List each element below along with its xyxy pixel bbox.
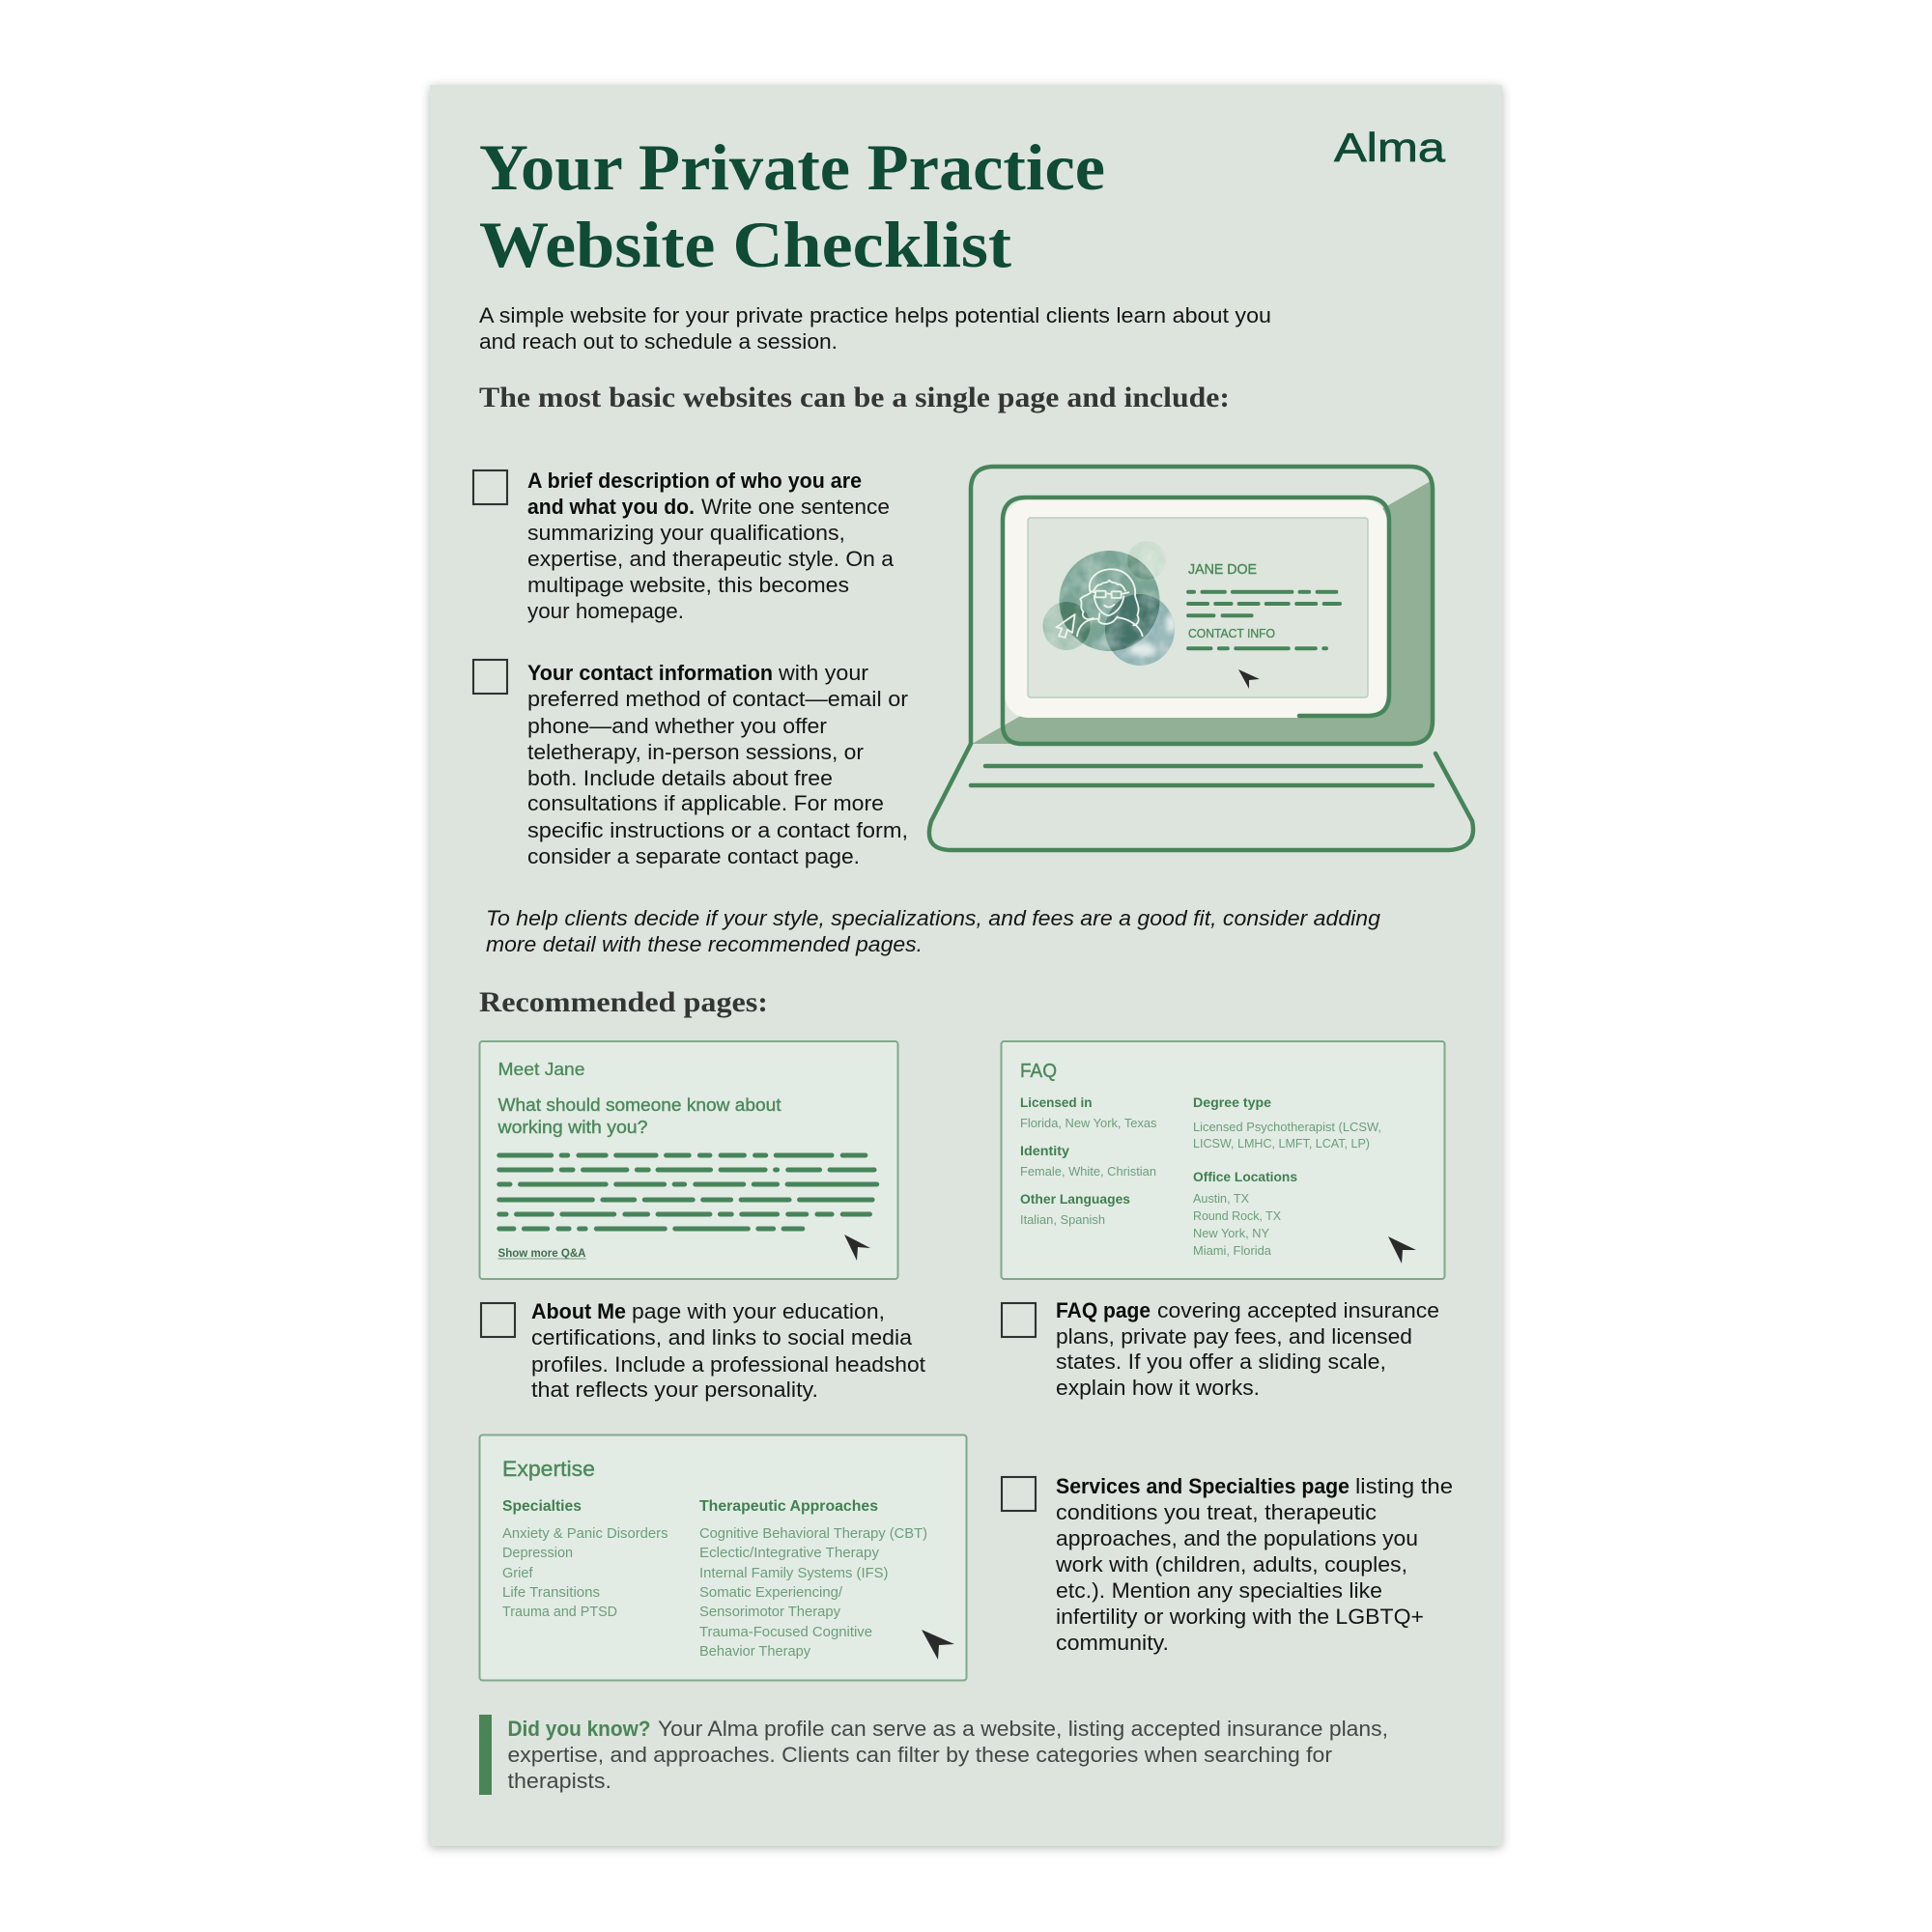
panel: Expertise card: Eclectic/Integrative Therapy [699, 1546, 880, 1561]
panel: FAQ card: Italian, Spanish [1020, 1213, 1105, 1227]
panel: FAQ card: Identity [1020, 1143, 1069, 1158]
panel: Expertise card [479, 1435, 966, 1681]
intro text [479, 303, 1271, 354]
panel: Meet Jane card: working with you? [497, 1117, 647, 1137]
text block: contact information: consider a separate contact page. [527, 844, 860, 868]
panel: Expertise card: Somatic Experiencing/ [699, 1585, 843, 1601]
panel: FAQ card: Licensed in [1020, 1094, 1092, 1110]
text block: Services and Specialties page: infertility or working with the LGBTQ+ [1056, 1605, 1424, 1629]
text block: contact information: with your [778, 661, 868, 685]
text block: contact information: Your contact information [527, 661, 773, 685]
text block: About Me page: that reflects your personality. [531, 1378, 818, 1402]
text block: About Me page: profiles. Include a professional headshot [531, 1352, 925, 1377]
panel: FAQ card: Licensed Psychotherapist (LCSW, [1193, 1121, 1381, 1134]
laptop page text: JANE DOE [1188, 562, 1257, 578]
panel: FAQ card: Degree type [1193, 1094, 1271, 1110]
text block: About Me page: page with your education, [632, 1299, 885, 1323]
text block: brief description: multipage website, this becomes [527, 573, 849, 597]
text block: Services and Specialties page: listing the [1355, 1474, 1453, 1498]
laptop web page [1028, 518, 1368, 697]
illustration: laptop [929, 467, 1473, 850]
text block: FAQ page: states. If you offer a sliding scale, [1056, 1350, 1386, 1374]
heading: recommended pages: Recommended pages: [479, 986, 768, 1018]
text block: Services and Specialties page: community. [1056, 1631, 1169, 1655]
text block: contact information: teletherapy, in-person sessions, or [527, 740, 864, 764]
panel: FAQ card: Round Rock, TX [1193, 1209, 1282, 1223]
text block: brief description: and what you do. [527, 495, 695, 519]
panel: Expertise card: Trauma-Focused Cognitive [699, 1625, 872, 1640]
panel: Expertise card: Behavior Therapy [699, 1644, 811, 1660]
watercolor portrait [1043, 541, 1176, 666]
title: Website Checklist [479, 208, 1011, 281]
panel: FAQ card: Office Locations [1193, 1169, 1297, 1184]
panel: Expertise card: Trauma and PTSD [502, 1605, 617, 1620]
panel: Expertise card: Anxiety & Panic Disorders [502, 1526, 668, 1542]
text block: Services and Specialties page: Services and Specialties page [1056, 1474, 1350, 1498]
text block: Services and Specialties page: approaches, and the populations you [1056, 1526, 1418, 1550]
panel: FAQ card: New York, NY [1193, 1227, 1270, 1240]
laptop lid shading [972, 481, 1431, 744]
text block: About Me page [531, 1299, 925, 1402]
text block: brief description: your homepage. [527, 599, 684, 623]
laptop screen bezel [1005, 499, 1387, 718]
panel: Expertise card: Internal Family Systems (IFS) [699, 1566, 889, 1581]
text block: FAQ page [1056, 1298, 1439, 1400]
panel: Expertise card: Life Transitions [502, 1585, 600, 1601]
panel: FAQ card: Miami, Florida [1193, 1244, 1271, 1258]
panel: Expertise card: Depression [502, 1546, 573, 1561]
panel: Meet Jane card [479, 1041, 898, 1279]
text block: contact information: both. Include details about free [527, 766, 833, 790]
text block: FAQ page: plans, private pay fees, and licensed [1056, 1324, 1412, 1349]
text block: brief description: expertise, and therapeutic style. On a [527, 547, 895, 571]
checkbox: Services [1002, 1477, 1036, 1511]
text block: contact information: consultations if applicable. For more [527, 791, 884, 815]
text block: Services and Specialties page: work with (children, adults, couples, [1055, 1552, 1407, 1577]
text block: FAQ page: FAQ page [1056, 1298, 1151, 1322]
panel: FAQ card: Austin, TX [1193, 1192, 1250, 1206]
text block: Services and Specialties page [1055, 1474, 1453, 1655]
callout: Did you know: Did you know? [508, 1717, 651, 1741]
text block: brief description [527, 469, 895, 623]
panel: Expertise card: Specialties [502, 1498, 582, 1515]
cursor [1238, 669, 1260, 689]
text block: brief description: Write one sentence [701, 495, 890, 519]
checkbox: contact [473, 660, 507, 694]
callout: Did you know: therapists. [508, 1769, 611, 1793]
panel: FAQ card: Florida, New York, Texas [1020, 1117, 1157, 1130]
text block: Services and Specialties page: conditions you treat, therapeutic [1056, 1500, 1377, 1524]
panel: FAQ card: Other Languages [1020, 1191, 1130, 1207]
illustration: laptop: CONTACT INFO [1188, 626, 1275, 640]
text block: contact information: specific instructions or a contact form, [527, 818, 908, 842]
text block: FAQ page: explain how it works. [1056, 1376, 1260, 1400]
text block: FAQ page: covering accepted insurance [1157, 1298, 1439, 1322]
laptop outer and inner outlines [929, 467, 1473, 850]
intro text: A simple website for your private practice helps potential clients learn about you [479, 303, 1271, 327]
panel: Meet Jane card: Meet Jane [498, 1060, 585, 1079]
italic transition text [486, 906, 1381, 956]
text block: brief description: A brief description of who you are [527, 469, 862, 493]
panel: FAQ card: LICSW, LMHC, LMFT, LCAT, LP) [1193, 1137, 1370, 1151]
text block: Services and Specialties page: etc.). Mention any specialties like [1056, 1578, 1382, 1603]
italic transition text: To help clients decide if your style, specializations, and fees are a good fit, consider adding [486, 906, 1381, 930]
panel: Expertise card: Grief [502, 1566, 533, 1581]
checkbox: description [473, 470, 507, 504]
portrait line drawing [1056, 569, 1143, 638]
panel: FAQ card: Female, White, Christian [1020, 1165, 1156, 1179]
panel: Expertise card: Cognitive Behavioral Therapy (CBT) [699, 1526, 927, 1542]
text block: contact information [527, 661, 908, 868]
intro text: and reach out to schedule a session. [479, 329, 838, 354]
panel: FAQ card: FAQ [1020, 1061, 1057, 1082]
panel: Meet Jane card: What should someone know about [498, 1094, 781, 1115]
title: Your Private Practice [479, 130, 1105, 204]
callout: Did you know [479, 1715, 1388, 1795]
callout: Did you know: expertise, and approaches. Clients can filter by these categories when searching for [508, 1743, 1332, 1767]
text block: contact information: phone—and whether you offer [527, 714, 827, 738]
callout: Did you know: Your Alma profile can serve as a website, listing accepted insurance plans, [658, 1717, 1388, 1741]
heading: most basic websites: The most basic websites can be a single page and include: [479, 382, 1230, 413]
placeholder text lines [499, 1155, 877, 1229]
text block: brief description: summarizing your qualifications, [527, 521, 845, 545]
text block: About Me page: About Me [531, 1299, 626, 1323]
panel: Expertise card: Therapeutic Approaches [699, 1498, 878, 1515]
panel: Meet Jane card: Show more Q&A [498, 1248, 585, 1260]
italic transition text: more detail with these recommended pages. [486, 932, 923, 956]
title [479, 130, 1105, 281]
checkbox: About Me [481, 1303, 515, 1337]
panel: FAQ card [1001, 1041, 1445, 1279]
logo: Alma: Alma [1334, 125, 1446, 170]
panel: Expertise card: Expertise [502, 1457, 595, 1481]
text block: contact information: preferred method of contact—email or [527, 687, 908, 711]
panel: checklist page background [430, 85, 1502, 1846]
text block: About Me page: certifications, and links to social media [531, 1325, 913, 1350]
panel: Expertise card: Sensorimotor Therapy [699, 1605, 841, 1620]
checkbox: FAQ [1002, 1303, 1036, 1337]
